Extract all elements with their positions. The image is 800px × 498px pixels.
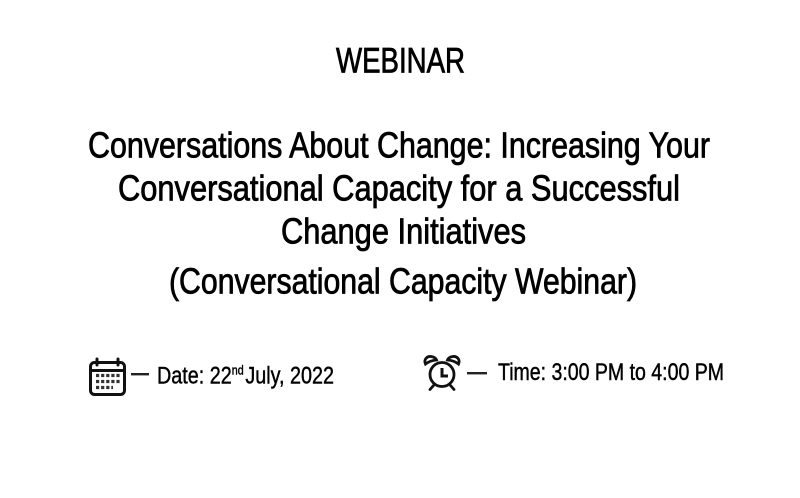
time text: Time: 3:00 PM to 4:00 PM [498, 359, 724, 386]
title [88, 124, 710, 252]
title: Conversational Capacity for a Successful [118, 168, 680, 208]
dash [131, 373, 149, 375]
dash [467, 372, 487, 374]
title: Change Initiatives [281, 210, 526, 252]
time row [425, 356, 724, 390]
date text: July, 2022 [245, 362, 334, 390]
date row [90, 359, 334, 394]
date text: Date: 22 [157, 362, 248, 390]
date text: nd [232, 362, 244, 378]
icon: alarm clock [425, 356, 459, 390]
icon: calendar [90, 359, 124, 394]
subtitle: (Conversational Capacity Webinar) [169, 260, 637, 302]
heading: webinar: WEBINAR [336, 42, 465, 81]
